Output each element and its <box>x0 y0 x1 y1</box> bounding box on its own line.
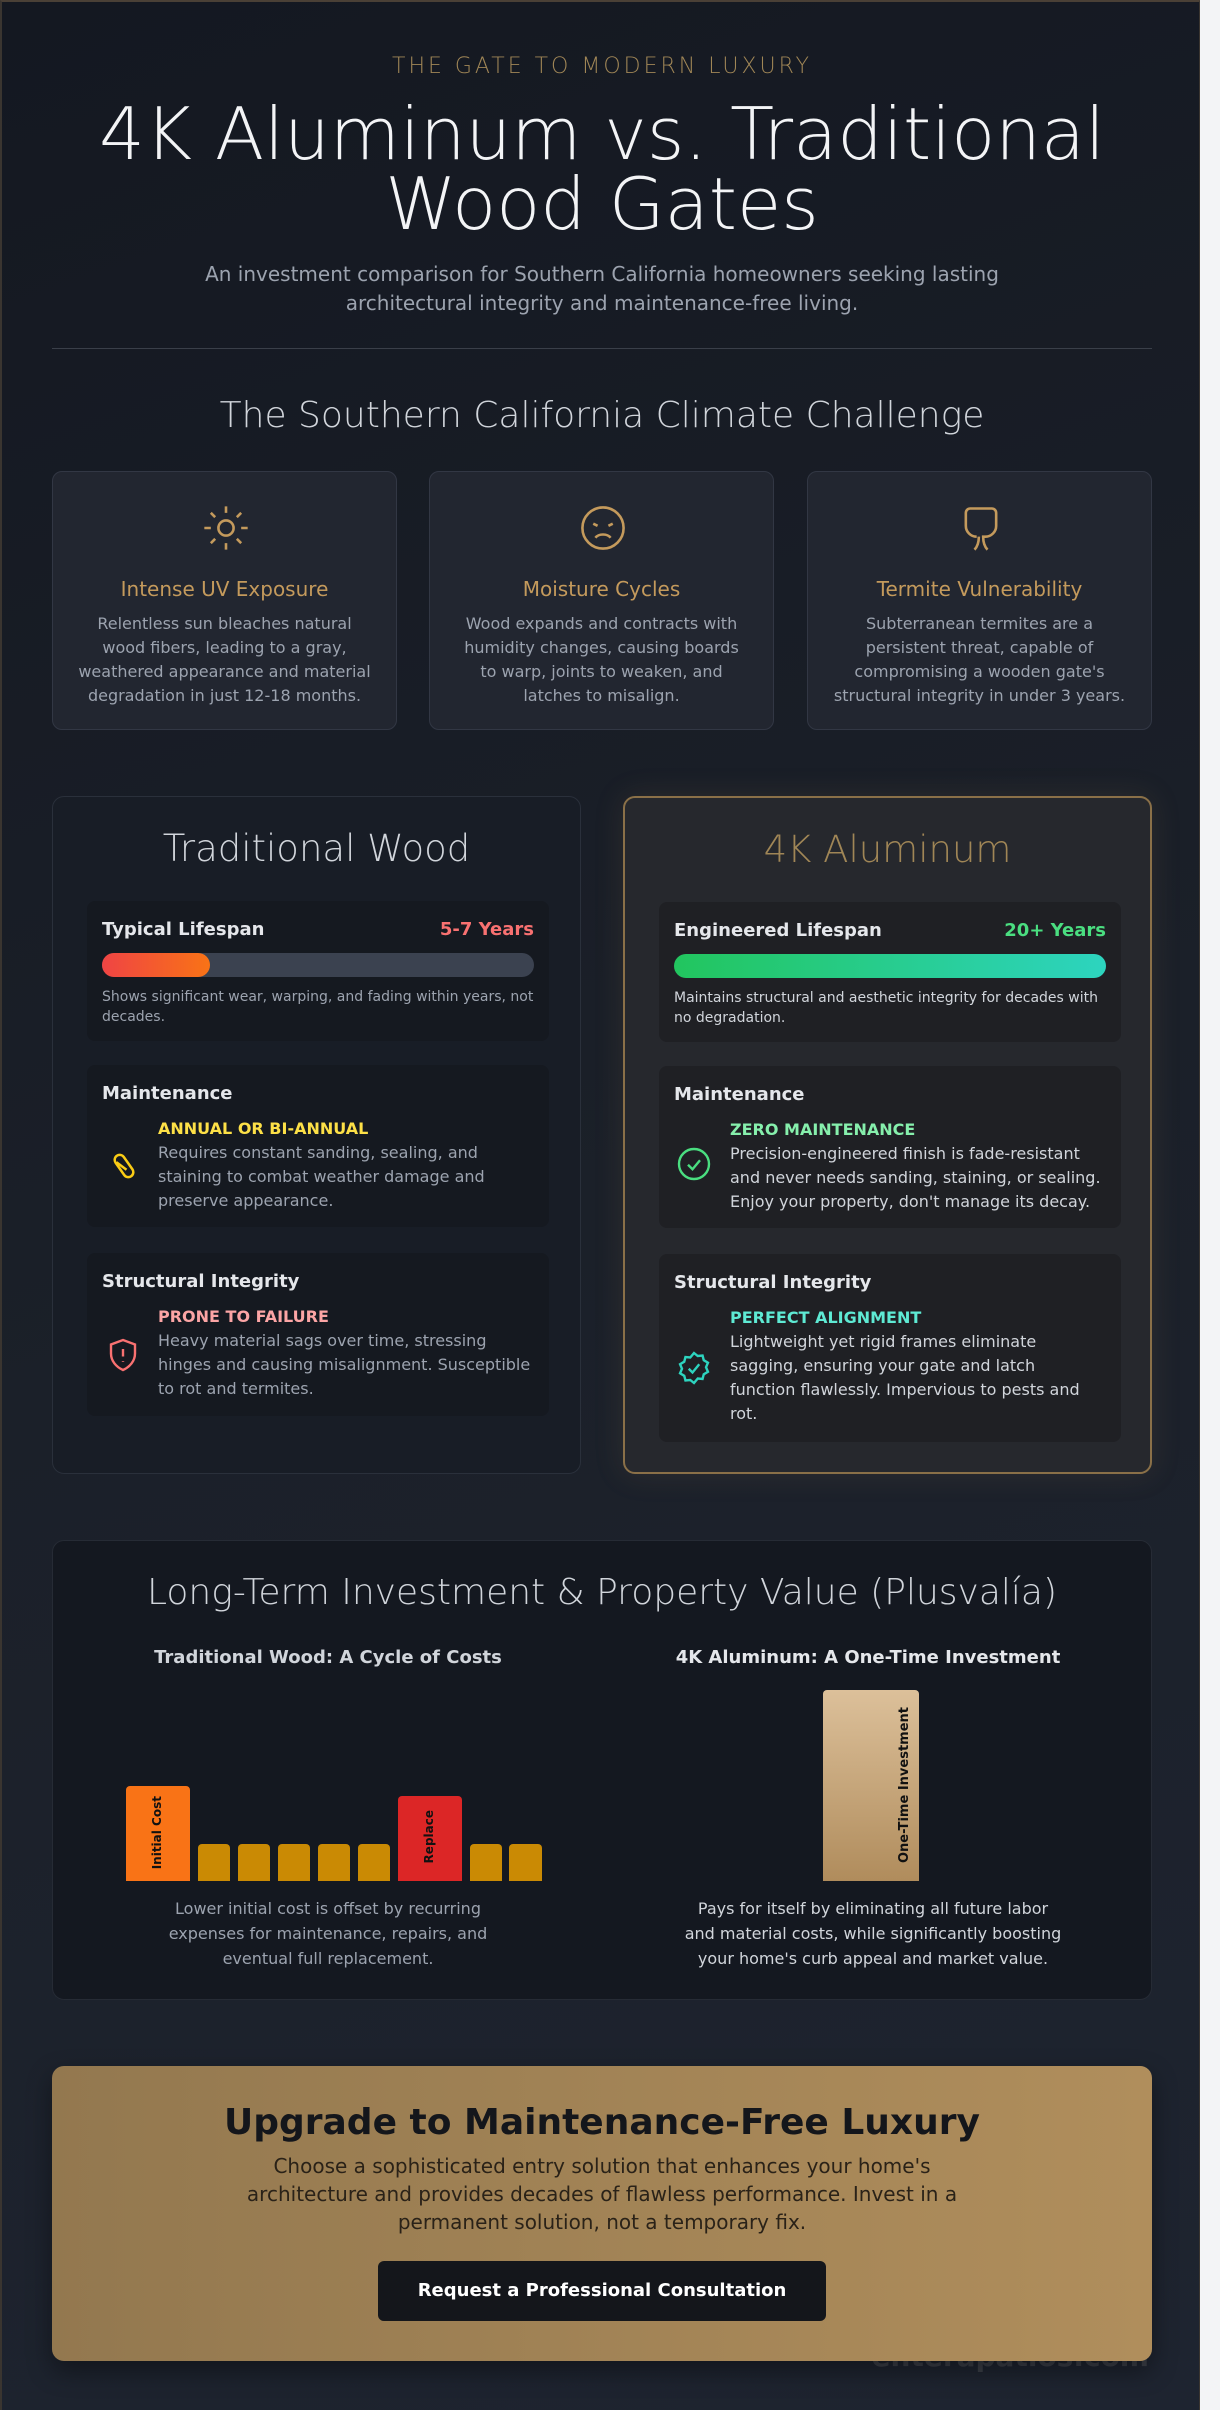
CTA text: Choose a sophisticated entry solution that enhances your home's architecture and provides decades of flawless performance. Invest in a permanent solution, not a temporary fix. <box>247 2154 957 2234</box>
box: structural <box>87 1253 549 1416</box>
button: Request a Professional Consultation <box>418 2280 786 2301</box>
icon: check circle <box>678 1148 710 1180</box>
bar chart: aluminum <box>823 1690 919 1881</box>
box: lifespan: Maintains structural and aesthetic integrity for decades with no degradation. <box>674 990 1098 1026</box>
title: 4K Aluminum vs. Traditional <box>99 92 1105 176</box>
panel: moisture card <box>429 471 774 730</box>
bar chart: wood costs: Initial Cost <box>150 1796 164 1869</box>
subtitle: An investment comparison for Southern California homeowners seeking lasting architectural integrity and maintenance-free living. <box>205 262 999 315</box>
box: structural: Lightweight yet rigid frames eliminate sagging, ensuring your gate and latch function flawlessly. Impervious to pests and rot. <box>730 1332 1080 1423</box>
panel: CTA <box>52 2066 1152 2361</box>
subheading: aluminum: 4K Aluminum: A One-Time Investment <box>676 1647 1060 1668</box>
box: structural: Structural Integrity <box>102 1271 299 1292</box>
panel: UV card: Intense UV Exposure <box>121 577 328 601</box>
box: lifespan: Typical Lifespan <box>102 919 264 940</box>
box: maintenance: Requires constant sanding, sealing, and staining to combat weather damage and preserve appearance. <box>158 1143 485 1210</box>
bar chart: wood costs <box>126 1786 542 1881</box>
panel: 4K aluminum <box>623 796 1152 1474</box>
title: Wood Gates <box>385 162 819 246</box>
panel: traditional wood <box>52 796 581 1474</box>
box: structural: PERFECT ALIGNMENT <box>730 1308 921 1327</box>
title <box>99 92 1105 246</box>
icon: bandage <box>113 1154 135 1178</box>
icon: sun <box>204 506 248 550</box>
panel: investment <box>52 1540 1152 2000</box>
panel: termite card: Subterranean termites are a persistent threat, capable of compromising a wooden gate's structural integrity in under 3 years. <box>834 614 1125 705</box>
icon: tooth <box>964 507 998 551</box>
CTA heading: Upgrade to Maintenance-Free Luxury <box>224 2102 980 2143</box>
panel: moisture card: Moisture Cycles <box>523 577 680 601</box>
box: maintenance: Maintenance <box>102 1083 233 1104</box>
box: maintenance: ANNUAL OR BI-ANNUAL <box>158 1119 368 1138</box>
box: lifespan: 20+ Years <box>1004 920 1106 941</box>
tagline: THE GATE TO MODERN LUXURY <box>392 54 812 79</box>
box: lifespan: 5-7 Years <box>440 919 534 940</box>
bar: lifespan <box>674 954 1106 978</box>
button <box>378 2261 826 2321</box>
caption: wood: Lower initial cost is offset by recurring expenses for maintenance, repairs, and eventual full replacement. <box>169 1899 487 1968</box>
box: maintenance <box>659 1066 1121 1228</box>
heading: traditional wood: Traditional Wood <box>163 827 470 870</box>
bar chart: aluminum: One-Time Investment <box>897 1707 912 1863</box>
box: structural: Structural Integrity <box>674 1272 871 1293</box>
box: maintenance <box>87 1065 549 1227</box>
icon: shield <box>110 1338 136 1372</box>
box: structural: Heavy material sags over time, stressing hinges and causing misalignment. Susceptible to rot and termites. <box>158 1331 530 1398</box>
box: structural <box>659 1254 1121 1442</box>
bar chart: wood costs: Replace <box>422 1810 436 1863</box>
box: lifespan <box>87 901 549 1041</box>
bar: lifespan <box>102 953 534 977</box>
box: lifespan: Shows significant wear, warping, and fading within years, not decades. <box>102 989 533 1025</box>
icon: sad face <box>581 506 625 550</box>
panel: UV card <box>52 471 397 730</box>
panel: termite card <box>807 471 1152 730</box>
box: maintenance: Precision-engineered finish is fade-resistant and never needs sanding, staining, or sealing. Enjoy your property, don't manage its decay. <box>730 1144 1101 1211</box>
panel: UV card: Relentless sun bleaches natural wood fibers, leading to a gray, weathered appearance and material degradation in just 12-18 months. <box>78 614 371 705</box>
heading: 4K aluminum: 4K Aluminum <box>764 828 1011 871</box>
box: structural: PRONE TO FAILURE <box>158 1307 329 1326</box>
box: maintenance: ZERO MAINTENANCE <box>730 1120 915 1139</box>
box: maintenance: Maintenance <box>674 1084 805 1105</box>
heading: investment: Long-Term Investment & Property Value (Plusvalía) <box>147 1572 1057 1613</box>
caption: aluminum: Pays for itself by eliminating all future labor and material costs, while significantly boosting your home's curb appeal and market value. <box>685 1899 1061 1968</box>
box: lifespan <box>659 902 1121 1042</box>
box: lifespan: Engineered Lifespan <box>674 920 882 941</box>
subheading: wood: Traditional Wood: A Cycle of Costs <box>154 1647 502 1668</box>
panel: termite card: Termite Vulnerability <box>877 577 1082 601</box>
section heading: climate: The Southern California Climate Challenge <box>220 395 984 436</box>
panel: moisture card: Wood expands and contracts with humidity changes, causing boards to warp, joints to weaken, and latches to misalign. <box>464 614 739 705</box>
icon: badge check <box>678 1351 710 1385</box>
watermark: enterapatios.com <box>872 2340 1149 2373</box>
